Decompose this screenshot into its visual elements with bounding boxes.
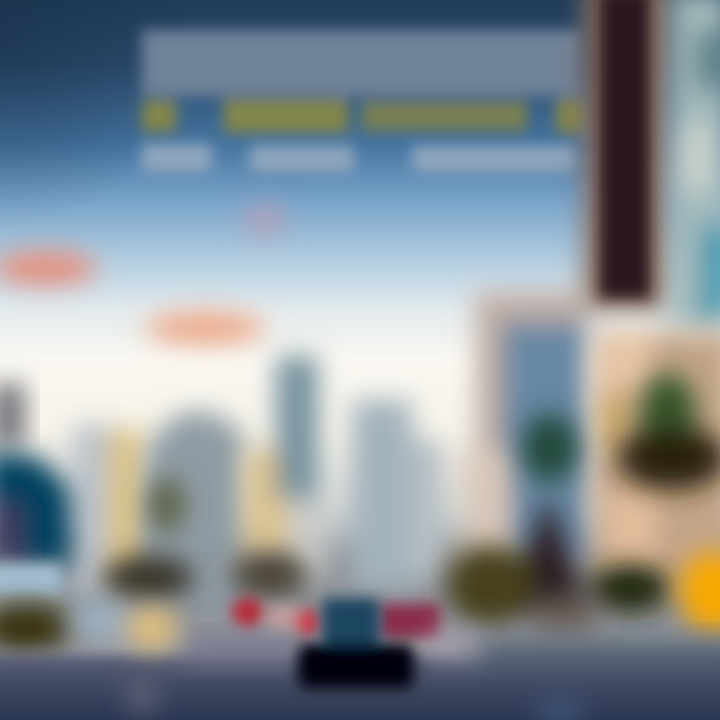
left pale shopfront: [0, 564, 62, 596]
road highlight mark: [128, 634, 584, 720]
palm trees and greenery: [0, 373, 720, 652]
road: [0, 654, 720, 720]
right group pale towers: [352, 400, 442, 590]
tall glass building: [464, 292, 588, 570]
pale kerb and light cars: [75, 604, 178, 650]
subtitle line: [142, 144, 577, 172]
skyline buildings: [0, 292, 720, 650]
central domed building: [146, 411, 244, 610]
right edge strip: [670, 0, 720, 330]
cloud centre: [145, 312, 265, 344]
title block: [142, 30, 586, 133]
yellow sign right: [680, 552, 720, 632]
cloud left: [0, 252, 97, 284]
left sky vignette: [0, 0, 200, 240]
palm right: [640, 373, 696, 457]
foreground dark tower: [584, 0, 670, 310]
shrub far left: [0, 604, 72, 652]
central dark car: [298, 598, 414, 688]
bush right: [590, 564, 670, 612]
cloud top: [243, 204, 287, 236]
heading line: yellow highlighted title: [142, 99, 586, 133]
left teal building: [0, 450, 70, 566]
small trees centre left: [148, 477, 184, 533]
slim blue tower: [244, 356, 325, 580]
red traffic vehicles: [232, 598, 440, 638]
bush left of centre: [446, 545, 534, 625]
right beige building: [594, 332, 720, 595]
palm centre: [522, 414, 578, 482]
heading line: pale blurred title: [142, 30, 582, 96]
pale building left: [72, 425, 144, 595]
floating pink cloud shapes: [0, 204, 287, 344]
far side kerb: [180, 636, 720, 664]
mid ground haze behind street: [0, 540, 720, 650]
far left tower: [0, 384, 24, 446]
